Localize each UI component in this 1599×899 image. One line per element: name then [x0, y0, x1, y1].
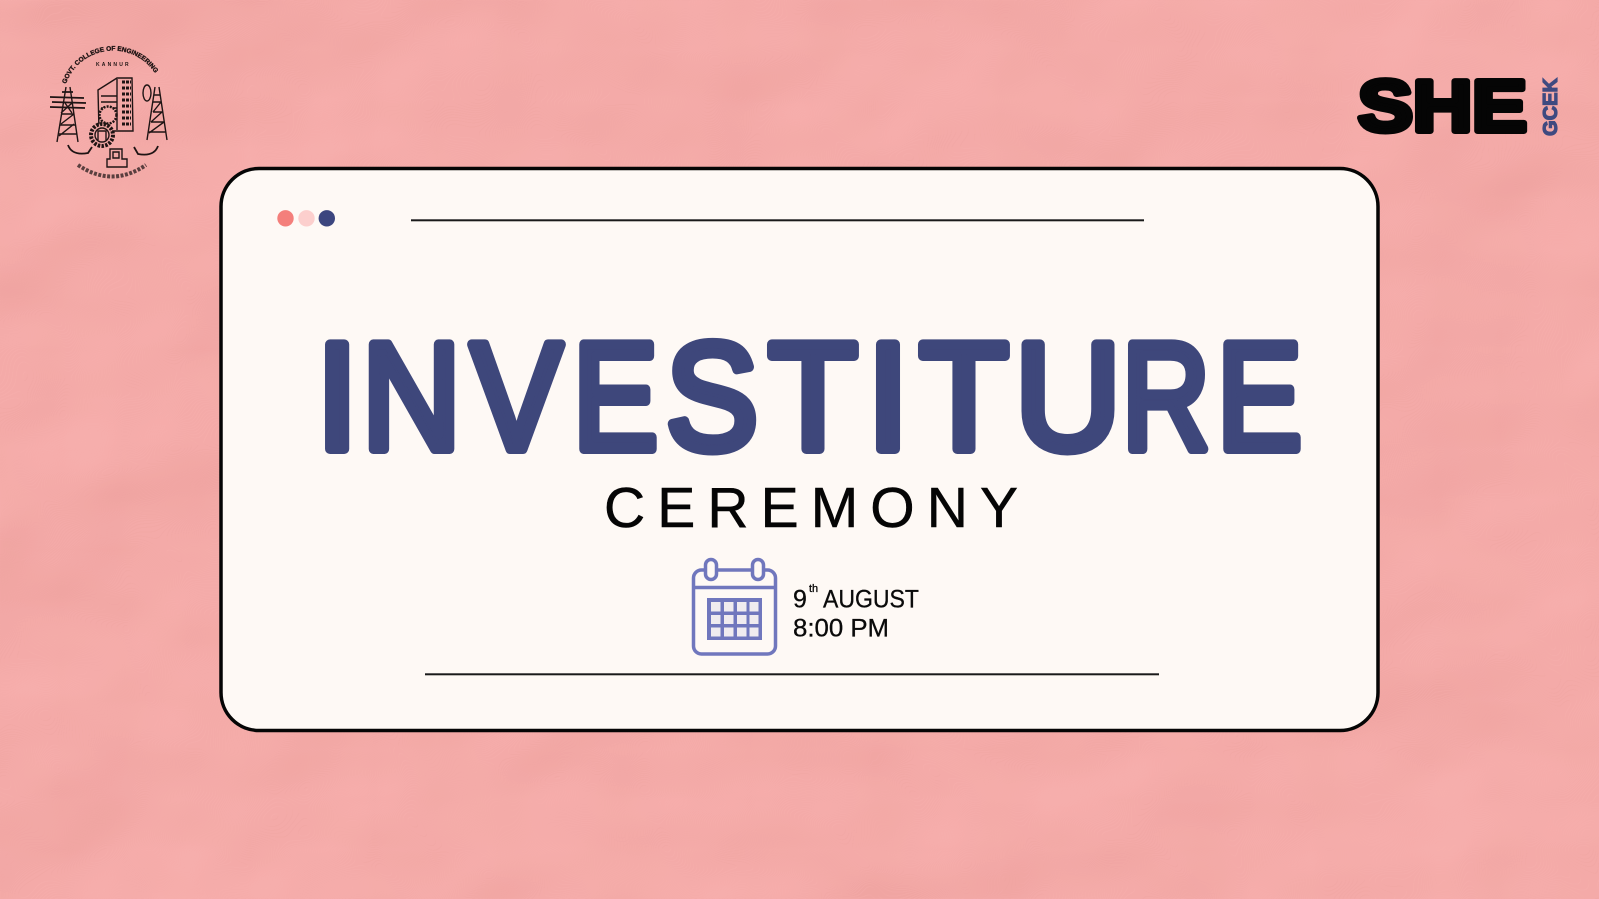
title: I [316, 312, 358, 482]
logo right lamp [134, 146, 158, 155]
bottom rule [425, 673, 1159, 675]
title: V [471, 312, 562, 482]
logo word GCEK: GCEK [1540, 77, 1562, 136]
logo motto [78, 165, 146, 176]
logo right tower [143, 85, 167, 140]
logo college name: GOVT. COLLEGE OF ENGINEERING [62, 46, 158, 84]
logo building [98, 78, 133, 131]
panel: main card [221, 168, 1378, 730]
logo: Govt. College of Engineering Kannur emblem [50, 46, 168, 178]
logo word SHE: SHE [1358, 67, 1527, 147]
title: N [362, 312, 461, 482]
title: E [1217, 312, 1302, 482]
title: T [920, 312, 1008, 482]
title: R [1122, 312, 1210, 482]
icon: calendar [694, 560, 776, 654]
title: T [768, 312, 858, 482]
title: U [1015, 312, 1121, 482]
title: E [573, 312, 658, 482]
window dots [277, 210, 335, 226]
title: S [666, 312, 758, 482]
date and time: 8:00 PM [793, 614, 889, 642]
date and time: 9 [793, 586, 807, 614]
logo left tower [50, 87, 86, 142]
date and time: AUGUST [823, 586, 919, 614]
logo: SHE GCEK [1358, 67, 1562, 147]
date and time: th [809, 583, 818, 595]
date and time [793, 583, 919, 642]
logo small machine [107, 149, 127, 167]
top rule [411, 219, 1144, 221]
subtitle: CEREMONY [604, 476, 1018, 540]
logo left lamp [68, 145, 92, 154]
logo gears [91, 106, 116, 146]
title: I [867, 312, 909, 482]
logo place name: KANNUR [96, 62, 131, 68]
